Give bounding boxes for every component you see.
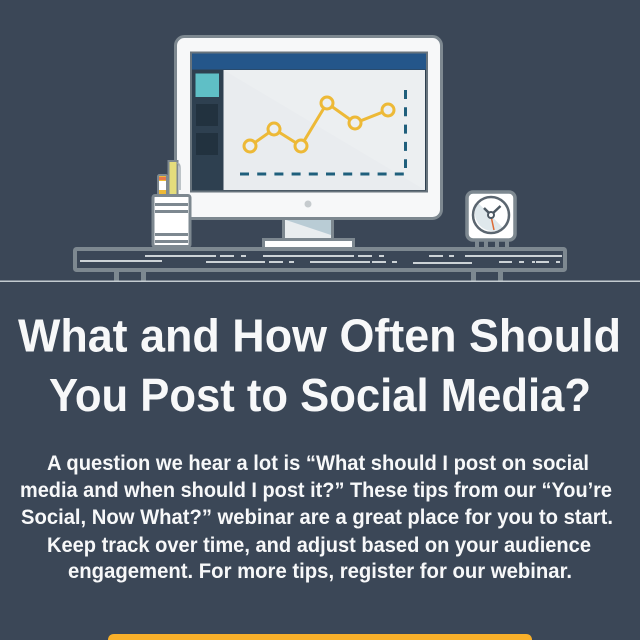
illustration: desk scene — [75, 36, 565, 281]
monitor stand — [264, 217, 354, 248]
title: What and How Often Should — [18, 310, 621, 362]
intro paragraph: engagement. For more tips, register for our webinar. — [68, 560, 572, 583]
screen — [191, 52, 427, 192]
button top edge — [108, 634, 532, 640]
clock — [467, 192, 515, 248]
title — [18, 310, 621, 421]
divider line — [0, 280, 640, 282]
title: You Post to Social Media? — [49, 369, 591, 421]
pen holder — [153, 161, 190, 246]
monitor — [176, 36, 442, 248]
intro paragraph — [20, 452, 613, 583]
intro paragraph: Social, Now What?” webinar are a great place for you to start. — [21, 506, 613, 529]
intro paragraph: media and when should I post it?” These tips from our “You’re — [20, 479, 612, 502]
desk — [75, 249, 565, 281]
intro paragraph: Keep track over time, and adjust based on your audience — [47, 534, 591, 557]
power button — [304, 200, 312, 208]
line chart — [240, 90, 406, 174]
monitor body — [176, 36, 442, 218]
intro paragraph: A question we hear a lot is “What should I post on social — [47, 452, 589, 475]
